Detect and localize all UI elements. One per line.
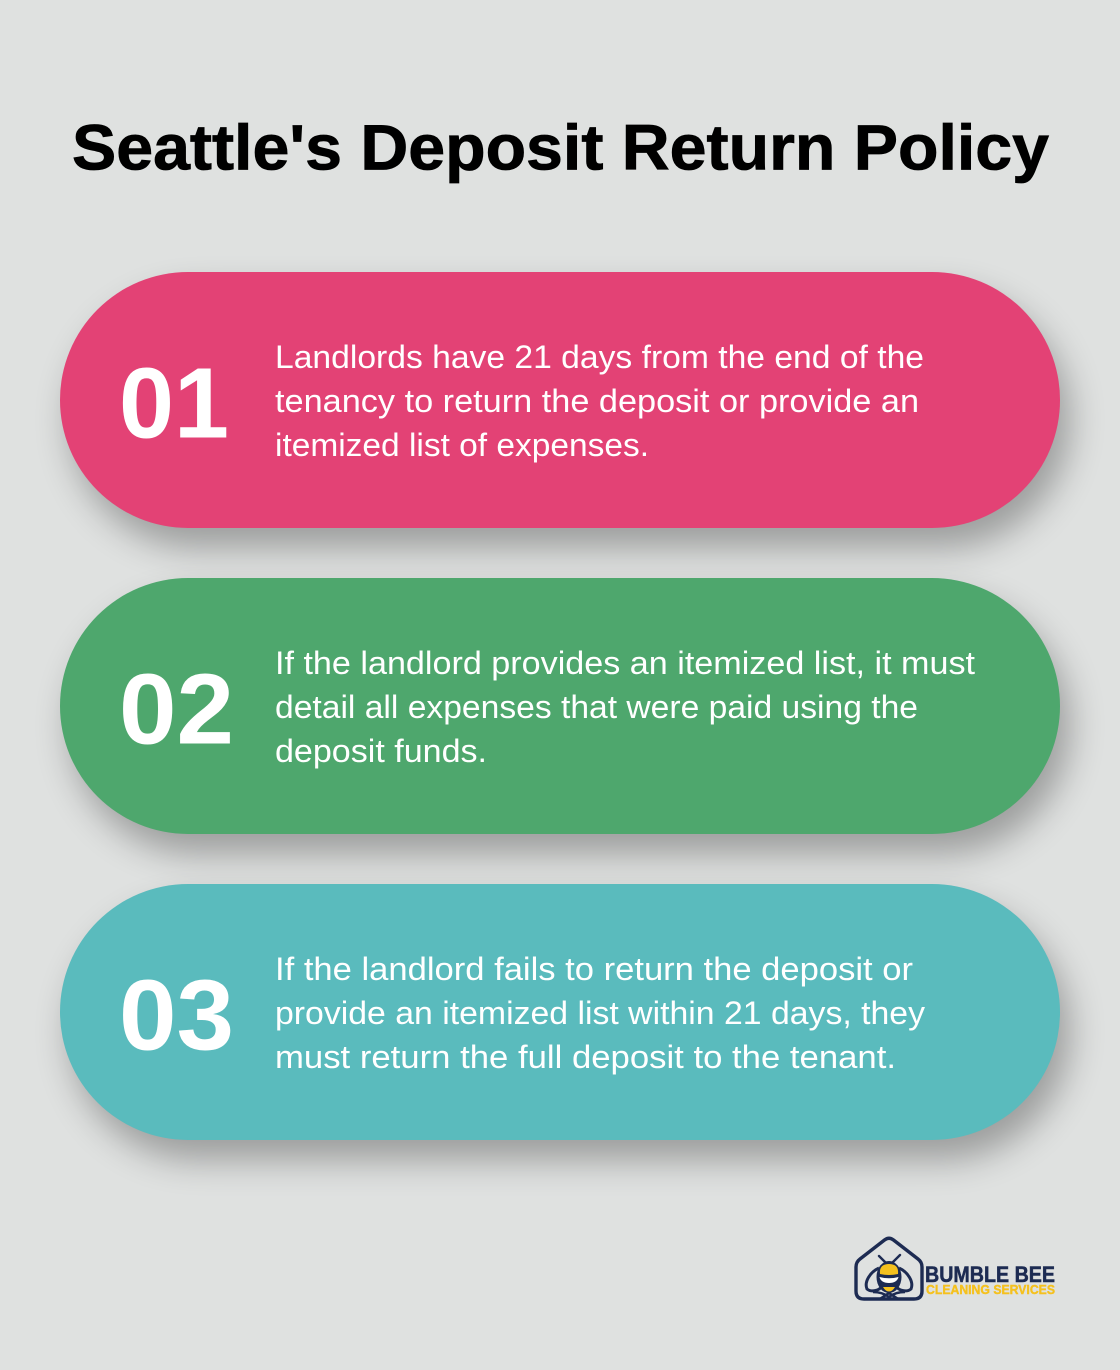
title: Seattle's Deposit Return Policy bbox=[72, 112, 1049, 184]
logo: Bumble Bee Cleaning Services bbox=[854, 1236, 1055, 1301]
text: step 03 description: If the landlord fails to return the deposit or bbox=[275, 951, 913, 987]
panel: step 01 bbox=[60, 272, 1060, 528]
logo wordmark: BUMBLE BEE bbox=[925, 1262, 1055, 1287]
number 03: 03 bbox=[119, 960, 234, 1072]
text: step 02 description: deposit funds. bbox=[275, 733, 487, 769]
text: step 01 description bbox=[275, 339, 924, 463]
text: step 01 description: Landlords have 21 days from the end of the bbox=[275, 339, 924, 375]
text: step 02 description: detail all expenses that were paid using the bbox=[275, 689, 918, 725]
text: step 01 description: tenancy to return the deposit or provide an bbox=[275, 383, 919, 419]
text: step 01 description: itemized list of expenses. bbox=[275, 427, 649, 463]
number 01: 01 bbox=[119, 348, 229, 460]
number 02: 02 bbox=[119, 654, 234, 766]
text: step 03 description: must return the full deposit to the tenant. bbox=[275, 1039, 896, 1075]
panel: step 03 bbox=[60, 884, 1060, 1140]
text: step 02 description: If the landlord provides an itemized list, it must bbox=[275, 645, 975, 681]
logo tagline: CLEANING SERVICES bbox=[926, 1283, 1055, 1297]
text: step 02 description bbox=[275, 645, 975, 769]
text: step 03 description bbox=[275, 951, 925, 1075]
text: step 03 description: provide an itemized list within 21 days, they bbox=[275, 995, 925, 1031]
icon: house with bee bbox=[856, 1238, 922, 1299]
panel: step 02 bbox=[60, 578, 1060, 834]
